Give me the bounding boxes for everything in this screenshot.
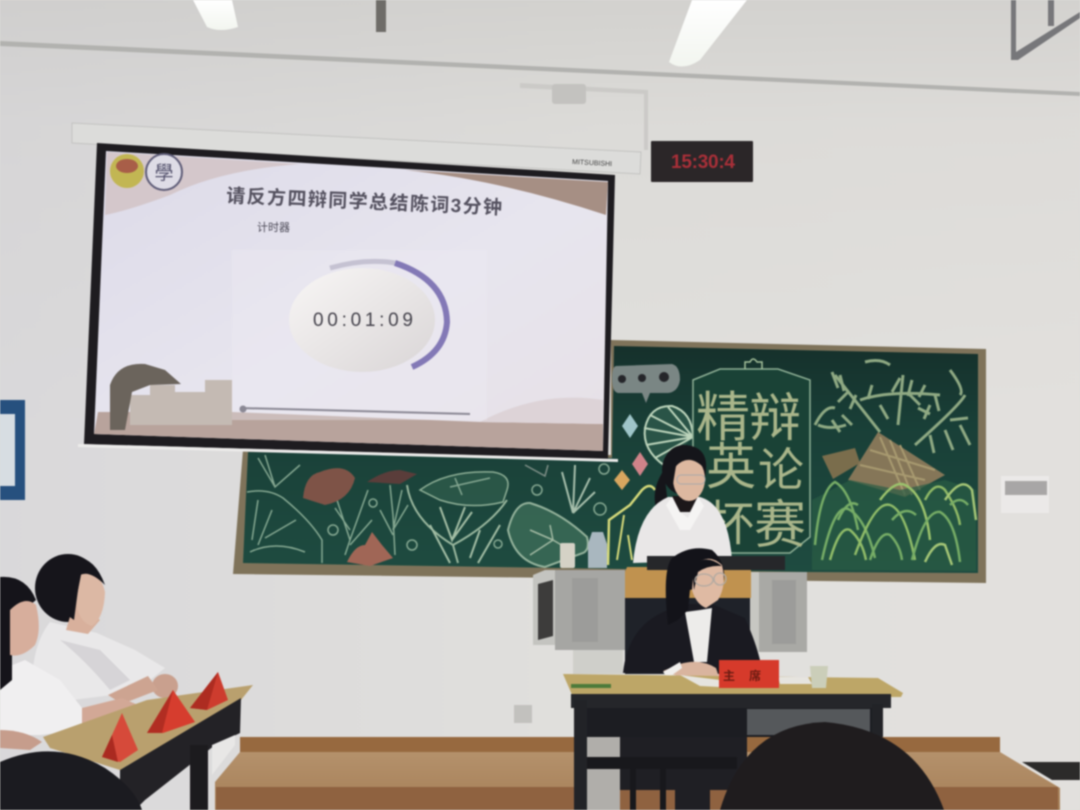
ceiling lights <box>193 0 1080 67</box>
timer dial: 00:01:09 <box>313 310 413 331</box>
digital clock: 15:30:4 <box>671 152 735 173</box>
mask ornament <box>612 364 680 403</box>
slide logos <box>110 154 182 190</box>
statue and skyline <box>110 364 232 430</box>
wall conduit <box>520 83 648 150</box>
center plaque with title characters: 辩 <box>749 390 801 448</box>
timer dial <box>289 261 447 372</box>
stage floor <box>215 737 1060 810</box>
center plaque with title characters: 精 <box>696 388 750 448</box>
ceiling beam line <box>0 41 1080 96</box>
shell ornament <box>644 406 693 466</box>
center plaque with title characters: 英 <box>706 439 756 495</box>
blackboard <box>233 340 986 583</box>
chair name placard <box>719 660 779 688</box>
foreground heads <box>0 722 944 810</box>
cup <box>810 666 828 688</box>
baseboard <box>1022 762 1080 780</box>
back side debater <box>32 554 178 705</box>
center plaque with title characters: 杯 <box>706 498 754 551</box>
hand outline chalk <box>608 486 655 565</box>
standing speaker <box>633 445 732 563</box>
slide logos: 學 <box>154 162 174 184</box>
lotus art on lower-left board <box>247 455 609 567</box>
grass hills <box>812 480 976 571</box>
chair table <box>563 674 903 810</box>
left poster <box>0 400 25 500</box>
diamonds <box>622 414 638 438</box>
chair name placard: 主席 <box>723 668 775 683</box>
slide heading: 请反方四辩同学总结陈词3分钟 <box>226 184 503 219</box>
wall notice <box>1001 476 1049 513</box>
center plaque with title characters: 赛 <box>754 497 806 555</box>
projector screen housing <box>72 123 641 174</box>
projector screen <box>84 143 615 459</box>
wall socket <box>514 705 532 723</box>
podium <box>533 532 807 674</box>
front side debater <box>0 577 138 750</box>
digital clock <box>651 141 753 182</box>
chairperson <box>623 548 760 680</box>
timer label: 计时器 <box>257 221 290 234</box>
red name tents <box>102 672 228 762</box>
bamboo and basket chalk art <box>815 361 970 497</box>
center plaque with title characters: 论 <box>758 444 804 496</box>
projector screen housing: MITSUBISHI <box>572 159 612 168</box>
side debate table <box>43 685 253 810</box>
center plaque with title characters <box>693 359 810 555</box>
screen bottom bar <box>78 444 618 462</box>
